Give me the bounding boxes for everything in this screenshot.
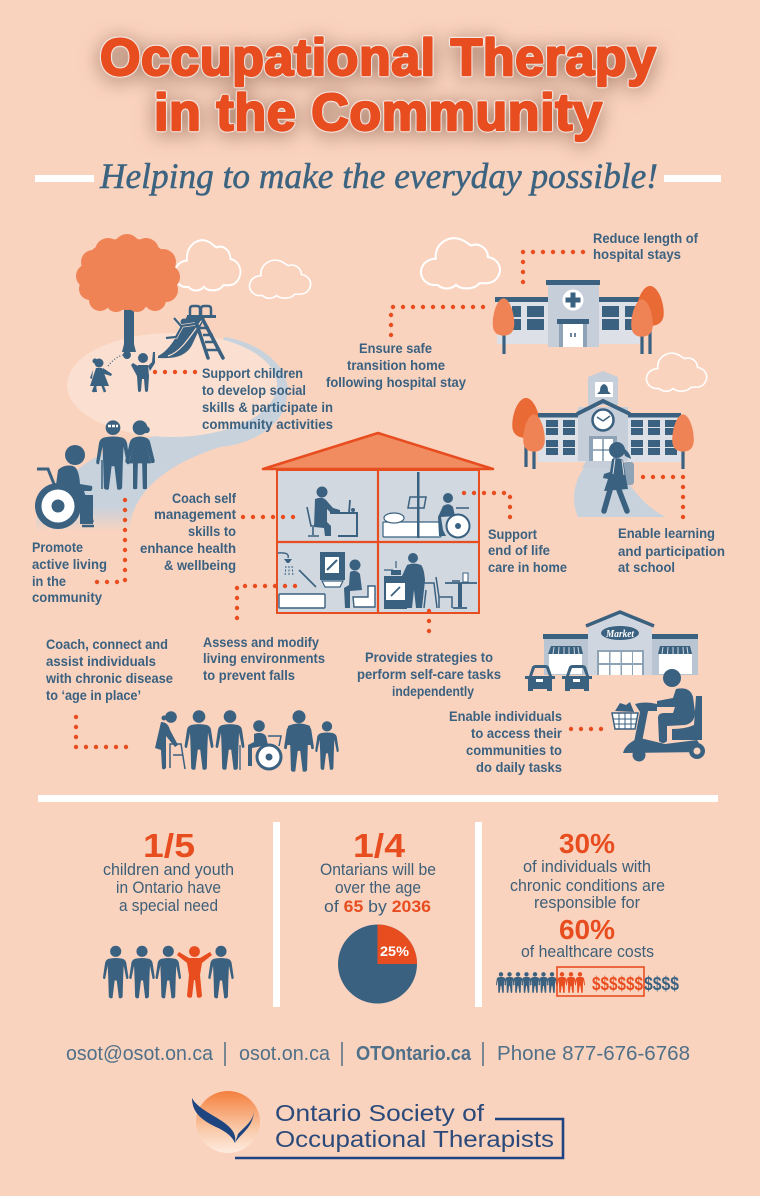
text: safe transition home: transition home	[347, 357, 445, 373]
text: support children: community activities	[202, 416, 333, 432]
text: provide strategies: independently	[392, 683, 474, 699]
logo: Ontario Society of Occupational Therapists: Occupational Therapists	[275, 1126, 554, 1152]
text: promote active living: active living	[32, 556, 107, 572]
text: access communities: to access their	[471, 725, 562, 741]
icon: market building: Market	[605, 629, 635, 640]
stat: 30 percent and 60 percent: chronic conditions are	[510, 876, 665, 895]
text: support end of life	[488, 526, 567, 575]
stat: 1 in 5 children	[103, 827, 234, 998]
cloud	[421, 238, 500, 289]
text: support children: to develop social	[202, 382, 306, 398]
text: coach connect assist: Coach, connect and	[46, 636, 168, 652]
room: bathroom	[278, 552, 375, 608]
stat: 1 in 5 children: children and youth	[103, 860, 234, 879]
text: promote active living: community	[32, 589, 102, 605]
park ground ellipse	[67, 333, 277, 437]
dotted connector: age in place	[76, 717, 135, 747]
title: in the Community	[154, 84, 602, 142]
text: safe transition home: Ensure safe	[359, 340, 432, 356]
logo: Ontario Society of Occupational Therapists	[192, 1091, 563, 1158]
text: support end of life: Support	[488, 526, 537, 542]
icon: market building	[543, 612, 698, 675]
text: learning at school	[618, 525, 725, 575]
text: assess and modify: living environments	[203, 650, 325, 666]
icon: slide with child	[158, 306, 223, 358]
room: bed and wheelchair	[383, 472, 470, 538]
cloud	[647, 353, 707, 391]
text: assess and modify: Assess and modify	[203, 634, 319, 650]
icon: cars	[525, 665, 592, 691]
text: learning at school: Enable learning	[618, 525, 715, 541]
dotted connector: falls	[237, 586, 295, 625]
contact line: osot@osot.on.ca	[66, 1043, 214, 1065]
text: promote active living	[32, 539, 107, 605]
pictogram: people and dollars: $$$$$$	[592, 974, 643, 995]
text: promote active living: in the	[32, 573, 66, 589]
text: provide strategies: Provide strategies to	[365, 649, 493, 665]
room: kitchen	[384, 553, 477, 609]
text: coach self management	[140, 490, 236, 573]
dotted connector: school	[643, 477, 683, 520]
icon: group of people	[155, 710, 339, 772]
trees	[493, 286, 664, 354]
room: desk	[307, 486, 357, 536]
icon: house with four rooms	[263, 433, 493, 613]
text: access communities: communities to	[466, 742, 562, 758]
contact line: OTOntario.ca	[356, 1043, 472, 1065]
text: reduce length of stay: Reduce length of	[593, 230, 698, 246]
text: coach connect assist	[45, 636, 173, 703]
logo: Ontario Society of Occupational Therapists: Ontario Society of	[275, 1100, 485, 1126]
text: support end of life: care in home	[488, 559, 567, 575]
stat: 1 in 4 Ontarians	[320, 827, 436, 1004]
dotted connector: end of life	[464, 493, 510, 520]
text: assess and modify	[203, 634, 325, 683]
text: access communities: Enable individuals	[449, 708, 562, 724]
text: provide strategies	[357, 649, 501, 699]
text: support children: skills & participate in	[202, 399, 333, 415]
text: promote active living: Promote	[32, 539, 83, 555]
contact line	[66, 1042, 690, 1066]
dotted connector: self-care	[427, 611, 431, 640]
stat: 30 percent and 60 percent: 60%	[559, 914, 615, 945]
text: assess and modify: to prevent falls	[203, 667, 295, 683]
dotted connector: children	[155, 370, 196, 374]
text: access communities: do daily tasks	[476, 759, 562, 775]
dotted connector: transition home	[391, 307, 483, 337]
icon: tree	[76, 234, 180, 352]
text: coach self management: enhance health	[140, 540, 236, 556]
icon: scooter rider with basket	[612, 669, 705, 762]
dotted connector: access communities	[571, 727, 602, 731]
text: coach self management: management	[154, 506, 236, 522]
stat: 1 in 4 Ontarians: over the age	[335, 878, 421, 897]
text: support children: Support children	[202, 365, 303, 381]
contact line: osot.on.ca	[239, 1043, 331, 1065]
dotted connector: length of stay	[523, 252, 583, 286]
text: coach self management: Coach self	[172, 490, 236, 506]
text: safe transition home: following hospital stay	[326, 374, 466, 390]
stat: 1 in 5 children: a special need	[119, 896, 218, 915]
text: coach self management: skills to	[188, 523, 236, 539]
text: learning at school: at school	[618, 559, 675, 575]
icon: five children	[103, 946, 234, 998]
text: coach connect assist: to ‘age in place’	[46, 687, 141, 703]
chart: pie 25 percent	[338, 924, 417, 1004]
stat: 1 in 4 Ontarians: Ontarians will be	[320, 860, 436, 879]
cloud	[175, 240, 240, 291]
text: coach connect assist: with chronic disease	[45, 670, 173, 686]
subtitle with side bars: Helping to make the everyday possible!	[99, 156, 658, 196]
stat: 1 in 5 children: 1/5	[143, 827, 195, 864]
icon: older couple	[96, 420, 155, 490]
text: access communities	[449, 708, 562, 775]
text: coach connect assist: assist individuals	[46, 653, 156, 669]
stat: 30 percent and 60 percent: of individuals with	[523, 857, 651, 876]
text: reduce length of stay: hospital stays	[593, 246, 681, 262]
text: coach self management: & wellbeing	[164, 557, 236, 573]
icon: student with backpack	[603, 442, 634, 511]
pictogram: people and dollars	[496, 967, 679, 996]
chart: pie 25 percent: 25%	[380, 943, 410, 959]
text: support end of life: end of life	[488, 542, 550, 558]
icon: hospital	[493, 280, 664, 354]
text: provide strategies: perform self-care tasks	[357, 666, 501, 682]
icon: school	[512, 371, 694, 469]
stat: 30 percent and 60 percent: of healthcare costs	[521, 942, 654, 961]
title	[100, 29, 656, 142]
stat: 1 in 4 Ontarians: of 65 by 2036	[324, 897, 431, 916]
school path	[574, 468, 666, 517]
stat: 1 in 4 Ontarians: 1/4	[353, 827, 406, 864]
icon: children playing with ball	[90, 351, 155, 392]
text: reduce length of stay	[593, 230, 698, 262]
community path	[36, 337, 288, 532]
dotted connector: coach self	[243, 515, 303, 519]
title: Occupational Therapy	[100, 29, 656, 87]
text: learning at school: and participation	[618, 543, 725, 559]
stat: 30 percent and 60 percent: responsible for	[534, 893, 640, 912]
text: safe transition home	[326, 340, 466, 390]
icon: person in wheelchair	[35, 445, 94, 529]
stat: 30 percent and 60 percent	[496, 828, 679, 996]
cloud	[250, 260, 311, 298]
contact line: Phone 877-676-6768	[497, 1043, 690, 1065]
stat: 1 in 5 children: in Ontario have	[116, 878, 221, 897]
stat: 30 percent and 60 percent: 30%	[559, 828, 615, 859]
dotted connector: active living	[89, 500, 125, 582]
text: support children	[202, 365, 333, 432]
pictogram: people and dollars: $$$$	[644, 974, 679, 995]
